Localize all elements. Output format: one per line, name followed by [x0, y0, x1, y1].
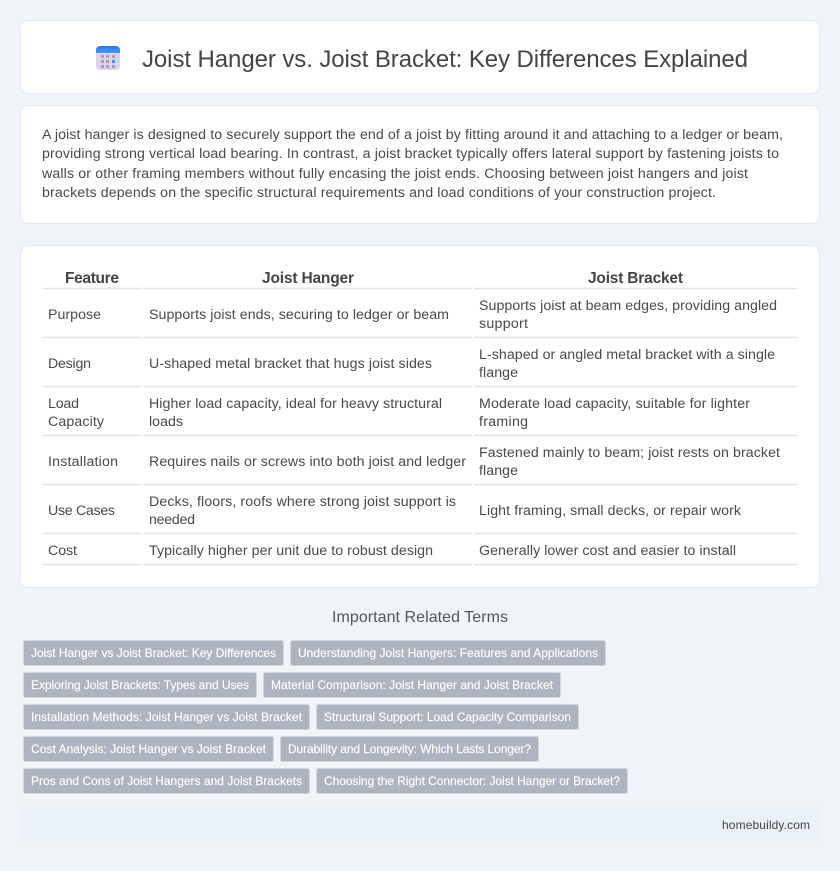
- panel: header: [20, 20, 820, 94]
- row: design: L-shaped or angled metal bracket with a single: [479, 347, 775, 363]
- tag: Material Comparison: Joist Hanger and Joist Bracket: [271, 678, 554, 692]
- tag: Joist Hanger vs Joist Bracket: Key Differences: [31, 646, 276, 660]
- intro paragraph: A joist hanger is designed to securely support the end of a joist by fitting around it and attaching to a ledger or beam,: [42, 127, 783, 143]
- footer: [20, 807, 820, 841]
- row: use cases: [48, 494, 742, 528]
- tag: Structural Support: Load Capacity Comparison: [324, 710, 571, 724]
- row: design: Design: [48, 356, 91, 372]
- row: cost: [48, 543, 736, 559]
- row: load capacity: Higher load capacity, ideal for heavy structural: [149, 396, 442, 412]
- row: purpose: Supports joist ends, securing to ledger or beam: [149, 307, 449, 323]
- row: purpose: Supports joist at beam edges, providing angled: [479, 298, 777, 314]
- row: load capacity: Load: [48, 396, 79, 412]
- table header: Joist Bracket: [588, 270, 683, 287]
- row: design: [48, 347, 775, 381]
- tag: Choosing the Right Connector: Joist Hanger or Bracket?: [324, 774, 620, 788]
- tag: [24, 736, 274, 762]
- table header: Feature: [65, 270, 119, 287]
- tag: [24, 768, 310, 794]
- row: use cases: Decks, floors, roofs where strong joist support is: [149, 494, 456, 510]
- row: installation: Installation: [48, 454, 118, 470]
- row: design: U-shaped metal bracket that hugs joist sides: [149, 356, 432, 372]
- title: Joist Hanger vs. Joist Bracket: Key Differences Explained: [142, 46, 748, 73]
- intro paragraph: walls or other framing members without fully encasing the joist ends. Choosing between joist hangers and joist: [41, 166, 748, 182]
- row: load capacity: Capacity: [48, 414, 105, 430]
- row: load capacity: framing: [479, 414, 528, 430]
- tag: [290, 640, 606, 666]
- intro paragraph: brackets depends on the specific structural requirements and load conditions of your construction project.: [42, 185, 716, 201]
- row: load capacity: Moderate load capacity, suitable for lighter: [479, 396, 750, 412]
- tag: [316, 704, 578, 730]
- tag: [280, 736, 538, 762]
- intro paragraph: providing strong vertical load bearing. In contrast, a joist bracket typically offers lateral support by fastening joists to: [42, 146, 779, 162]
- row: cost: Generally lower cost and easier to install: [479, 543, 736, 559]
- row: load capacity: [48, 396, 750, 430]
- tag: Exploring Joist Brackets: Types and Uses: [31, 678, 249, 692]
- row: load capacity: loads: [149, 414, 183, 430]
- footer: homebuildy.com: [722, 818, 810, 832]
- row: purpose: support: [479, 316, 528, 332]
- tag: [24, 640, 284, 666]
- related term tags: [24, 640, 628, 794]
- row: installation: flange: [479, 463, 518, 479]
- row: cost: Cost: [48, 543, 77, 559]
- heading: related terms: Important Related Terms: [332, 609, 508, 626]
- row: purpose: [48, 298, 777, 332]
- tag: [264, 672, 560, 698]
- tag: Durability and Longevity: Which Lasts Longer?: [288, 742, 531, 756]
- panel: introduction: [20, 106, 820, 224]
- row: installation: Requires nails or screws into both joist and ledger: [149, 454, 466, 470]
- tag: [24, 672, 256, 698]
- row: design: flange: [479, 365, 518, 381]
- panel: comparison table: [20, 246, 820, 588]
- row: installation: Fastened mainly to beam; joist rests on bracket: [479, 445, 780, 461]
- icon: calendar: [96, 46, 120, 70]
- tag: [316, 768, 628, 794]
- intro paragraph: [41, 127, 783, 201]
- table header: [65, 270, 683, 287]
- tag: Pros and Cons of Joist Hangers and Joist Brackets: [31, 774, 302, 788]
- tag: [24, 704, 310, 730]
- row: use cases: Use Cases: [48, 503, 115, 519]
- tag: Cost Analysis: Joist Hanger vs Joist Bracket: [31, 742, 267, 756]
- tag: Installation Methods: Joist Hanger vs Joist Bracket: [31, 710, 303, 724]
- tag: Understanding Joist Hangers: Features and Applications: [298, 646, 598, 660]
- row: use cases: needed: [149, 512, 195, 528]
- row: purpose: Purpose: [48, 307, 101, 323]
- row: installation: [48, 445, 780, 479]
- table header: Joist Hanger: [262, 270, 354, 287]
- row: cost: Typically higher per unit due to robust design: [149, 543, 433, 559]
- row: use cases: Light framing, small decks, or repair work: [479, 503, 742, 519]
